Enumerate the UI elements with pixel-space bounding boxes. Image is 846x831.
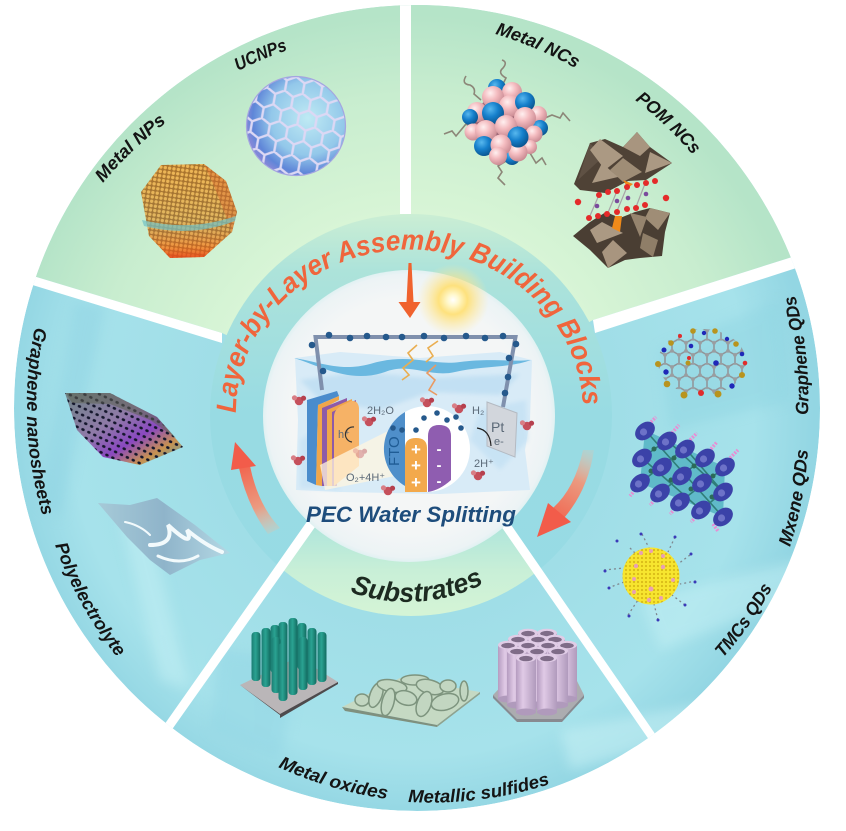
light beam bbox=[320, 425, 400, 490]
heading: Substrates bbox=[352, 572, 482, 602]
water molecules bbox=[291, 395, 534, 495]
icon: metal nanoparticle bbox=[141, 164, 237, 258]
icon: UCNP hexagon sphere bbox=[246, 76, 346, 176]
photoanode bbox=[307, 391, 339, 485]
icon: graphene nanosheet bbox=[65, 393, 183, 465]
icon: nanorod array on substrate bbox=[240, 618, 338, 718]
title: Layer-by-Layer Assembly Building Blocks: Layer-by-Layer Assembly Building Blocks bbox=[216, 230, 600, 412]
label: Metal NPs: Metal NPs bbox=[95, 116, 164, 183]
label: Metal oxides: Metal oxides bbox=[278, 756, 388, 798]
label: Graphene QDs: Graphene QDs bbox=[786, 296, 812, 414]
label: Metallic sulfides: Metallic sulfides bbox=[408, 776, 548, 803]
Pt electrode bbox=[487, 402, 517, 457]
panel: PEC cell illustration: H₂ bbox=[472, 405, 484, 417]
wave bbox=[294, 358, 531, 376]
icon: sun bbox=[417, 264, 489, 336]
label: Graphene nanosheets: Graphene nanosheets bbox=[26, 328, 51, 514]
panel: PEC cell illustration: e- bbox=[494, 436, 504, 448]
panel: PEC cell illustration: 2H⁺ bbox=[474, 458, 494, 470]
icon: TMC quantum dot bbox=[604, 532, 696, 622]
arrow: right cycle arrow bbox=[537, 450, 594, 537]
panel: PEC cell illustration: O₂+4H⁺ bbox=[346, 472, 385, 484]
panel: PEC cell illustration: Pt bbox=[491, 419, 504, 435]
zoom circle bbox=[384, 406, 470, 492]
water background bbox=[295, 352, 532, 494]
icon: POM nanocluster bbox=[573, 132, 672, 268]
icon: MXene quantum dot bbox=[626, 417, 739, 531]
label: UCNPs: UCNPs bbox=[234, 42, 286, 70]
panel: PEC cell illustration: - bbox=[436, 457, 442, 474]
panel: PEC cell illustration: + bbox=[411, 456, 421, 475]
panel: PEC cell illustration: h⁺ bbox=[338, 429, 350, 441]
centre ring bbox=[211, 214, 610, 616]
label: Polyelectrolyte: Polyelectrolyte bbox=[55, 543, 124, 655]
heading: PEC Water Splitting: PEC Water Splitting bbox=[306, 502, 517, 527]
panel: PEC cell illustration: - bbox=[436, 473, 442, 490]
dividers between substrates panel and neighbours bbox=[166, 522, 655, 738]
arrow: left cycle arrow bbox=[231, 442, 280, 534]
label: UCNPs bbox=[234, 42, 286, 70]
panel: PEC cell illustration: + bbox=[411, 440, 421, 459]
heading: Substrates: Substrates bbox=[352, 572, 482, 602]
icon: nanotube array on substrate bbox=[493, 629, 584, 722]
light rays bbox=[402, 341, 438, 395]
label: POM NCs: POM NCs bbox=[635, 92, 699, 153]
panel: PEC cell illustration: + bbox=[411, 473, 421, 492]
inner circle bbox=[263, 270, 555, 562]
label: Metal NCs: Metal NCs bbox=[495, 22, 579, 67]
panel: PEC cell illustration: FTO bbox=[386, 436, 403, 466]
panel: PEC cell illustration bbox=[291, 332, 534, 495]
icon: metal nanocluster bbox=[444, 60, 570, 185]
panel: PEC cell illustration: - bbox=[436, 441, 442, 458]
reaction labels: 2H₂O bbox=[367, 405, 394, 417]
arrow: light going down bbox=[398, 263, 420, 318]
icon: polyelectrolyte film bbox=[98, 498, 230, 575]
label: Mxene QDs: Mxene QDs bbox=[778, 450, 809, 547]
icon: graphene quantum dot bbox=[655, 326, 750, 398]
icon: nanosheet film on substrate bbox=[342, 675, 480, 727]
wire bbox=[316, 337, 516, 407]
label: TMCs QDs: TMCs QDs bbox=[714, 584, 771, 656]
